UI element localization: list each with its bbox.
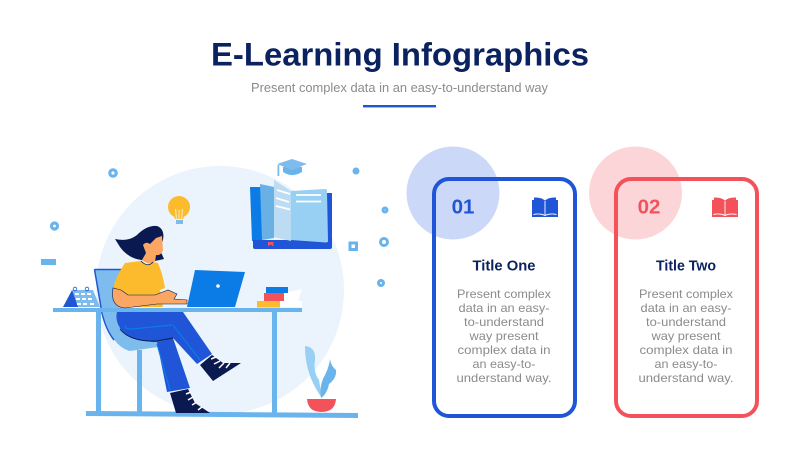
icon: book — [712, 197, 738, 217]
title underline — [363, 105, 436, 107]
title: E-Learning Infographics — [211, 36, 589, 72]
card body text: understand way. — [456, 371, 552, 385]
card body text: complex data in — [640, 343, 732, 357]
icon: light bulb — [168, 196, 190, 224]
card body text: Present complex — [457, 287, 551, 301]
plant — [305, 346, 336, 412]
card border — [434, 179, 575, 416]
neck and face — [142, 236, 163, 264]
card body text: data in an easy- — [458, 301, 550, 315]
card body text: complex data in — [458, 343, 550, 357]
trousers — [157, 338, 190, 392]
stack of books — [257, 287, 302, 308]
card body text: an easy-to- — [472, 357, 536, 371]
panel: card 02 — [589, 146, 757, 416]
subtitle: Present complex data in an easy-to-understand way — [251, 80, 548, 95]
icon: graduation cap — [277, 159, 307, 176]
icon: book — [532, 197, 558, 217]
card body text — [638, 287, 734, 385]
shoes — [200, 355, 241, 381]
card body text: to-understand — [646, 315, 726, 329]
desk — [53, 308, 302, 413]
calendar — [63, 287, 100, 307]
card body text: an easy-to- — [654, 357, 718, 371]
panel: card 01 — [406, 146, 575, 416]
shirt — [113, 261, 165, 307]
card body text: way present — [468, 329, 539, 343]
card title: Title Two — [656, 258, 716, 274]
background circle — [96, 166, 344, 414]
icon: open book — [250, 180, 332, 249]
laptop — [187, 270, 245, 307]
neckline — [113, 261, 153, 291]
card body text: to-understand — [464, 315, 544, 329]
decorative dots — [52, 169, 388, 286]
card body text — [456, 287, 552, 385]
icon: minus chip — [41, 259, 56, 265]
number: 02 — [638, 196, 660, 218]
card title: Title One — [472, 258, 536, 274]
illustration: woman studying at desk — [41, 159, 388, 418]
floor — [86, 411, 358, 418]
badge circle — [406, 146, 500, 240]
card border — [616, 179, 757, 416]
badge circle — [589, 146, 682, 240]
chair — [94, 269, 158, 412]
person — [112, 226, 241, 413]
number: 01 — [452, 196, 474, 218]
card body text: understand way. — [638, 371, 734, 385]
hair — [115, 226, 164, 261]
card body text: Present complex — [639, 287, 733, 301]
arms — [112, 288, 187, 308]
card body text: data in an easy- — [640, 301, 732, 315]
card body text: way present — [650, 329, 721, 343]
